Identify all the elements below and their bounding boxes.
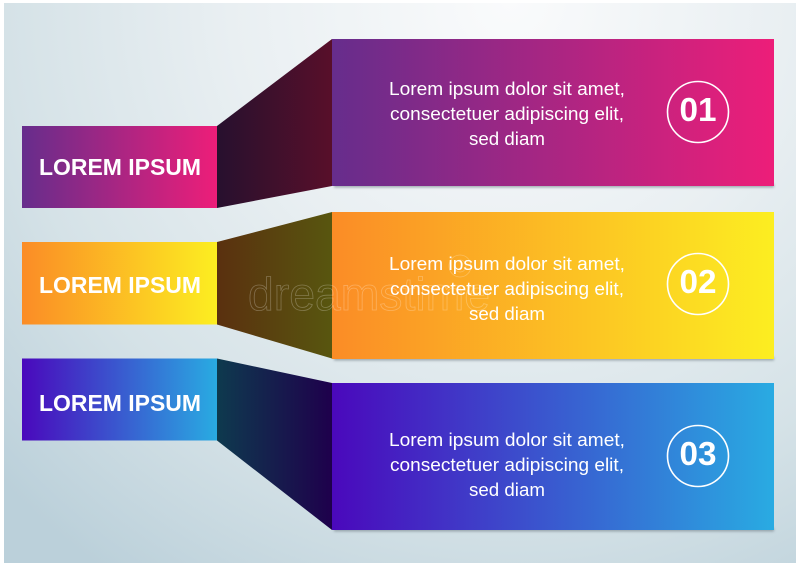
description text 3: Lorem ipsum dolor sit amet, (389, 429, 625, 450)
panel shadow 1 (334, 184, 774, 188)
number badge 02 (668, 254, 728, 314)
description text 3: sed diam (469, 479, 545, 500)
panel shadow 2 (334, 357, 774, 360)
number badge 01: 01 (680, 91, 716, 128)
number badge 02: 02 (680, 263, 716, 300)
connector face 1 (217, 39, 332, 208)
label box 2 (22, 242, 217, 324)
label box 2: LOREM IPSUM (39, 272, 201, 298)
label box 1 (22, 126, 217, 208)
label box 1: LOREM IPSUM (39, 154, 201, 180)
description text 2: Lorem ipsum dolor sit amet, (389, 253, 625, 274)
connector face 3 (217, 358, 332, 530)
row 3: violet to blue (22, 358, 774, 532)
content panel 3 (332, 383, 774, 530)
number badge 03: 03 (680, 435, 716, 472)
connector face 2 (217, 212, 332, 358)
panel shadow 3 (334, 528, 774, 532)
row 1: purple to pink (22, 39, 774, 208)
number badge 03 (668, 426, 728, 486)
description text 3: consectetuer adipiscing elit, (390, 454, 624, 475)
label box 3 (22, 358, 217, 440)
number badge 01 (668, 82, 728, 142)
watermark: dreamstime (248, 268, 490, 320)
description text 2: sed diam (469, 303, 545, 324)
description text 1: consectetuer adipiscing elit, (390, 103, 624, 124)
label box 3: LOREM IPSUM (39, 390, 201, 416)
content panel 2 (332, 212, 774, 359)
description text 1: Lorem ipsum dolor sit amet, (389, 78, 625, 99)
content panel 1 (332, 39, 774, 186)
description text 1: sed diam (469, 128, 545, 149)
row 2: orange to yellow (22, 212, 774, 360)
description text 2: consectetuer adipiscing elit, (390, 278, 624, 299)
